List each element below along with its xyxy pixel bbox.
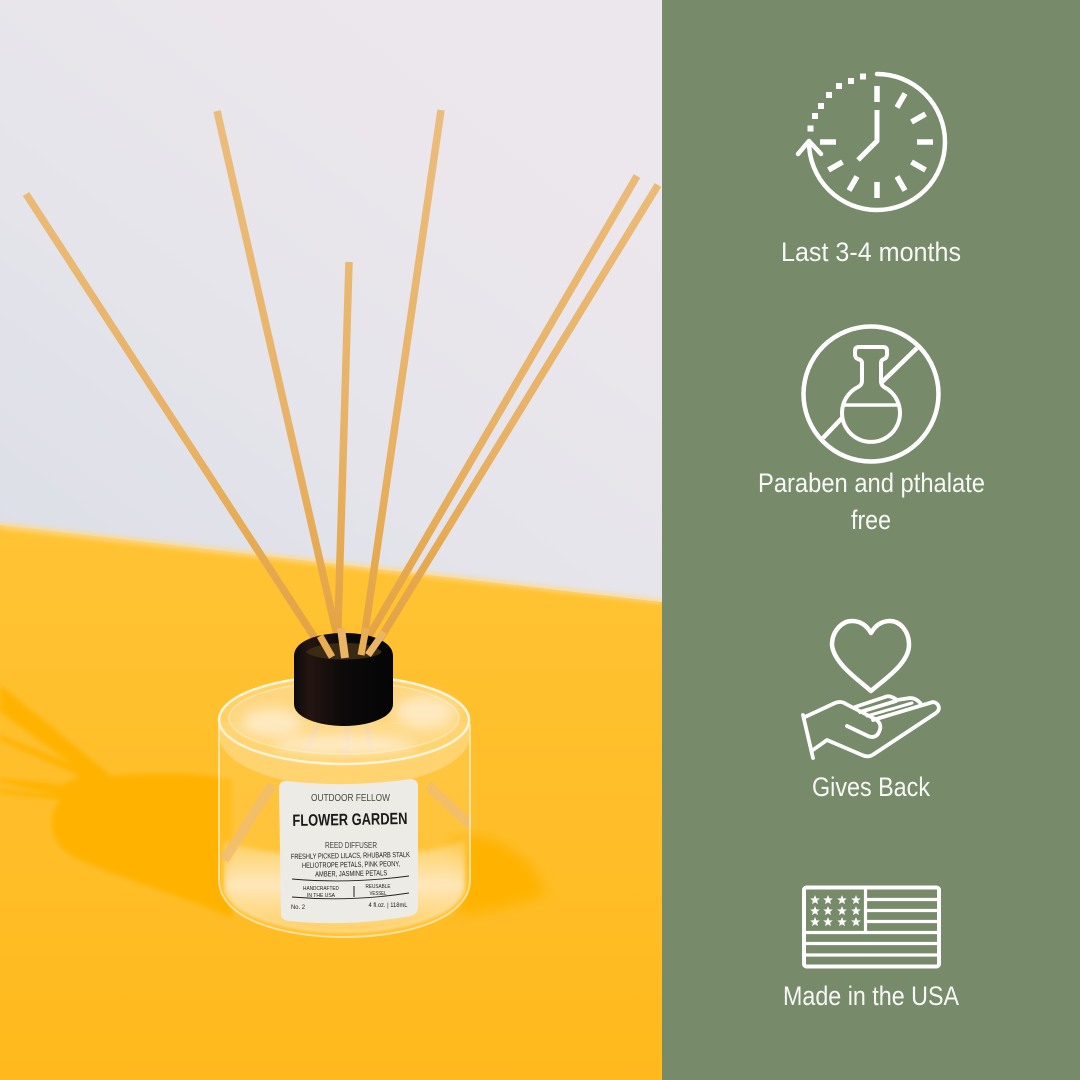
liquid in bottle (224, 840, 465, 930)
product name: FLOWER GARDEN (292, 810, 408, 830)
fragrance notes: AMBER, JASMINE PETALS (315, 868, 387, 879)
icon: hand holding heart (803, 621, 939, 758)
icon: American flag (804, 888, 939, 966)
reusable note (366, 884, 391, 897)
icon: crossed-out flask (804, 326, 938, 462)
submerged reeds (224, 724, 470, 860)
caption: origin: Made in the USA (783, 981, 959, 1011)
fragrance notes: FRESHLY PICKED LILACS, RHUBARB STALK (291, 850, 410, 861)
panel: product benefits (662, 0, 1080, 1080)
diffuser reeds (26, 110, 658, 658)
handcrafted note (303, 886, 339, 899)
caption: ingredients: Paraben and pthalate (758, 468, 985, 498)
caption: ingredients: free (851, 505, 891, 535)
batch number: No. 2 (291, 904, 305, 911)
fragrance notes: HELIOTROPE PETALS, PINK PEONY, (302, 859, 400, 870)
handcrafted note: HANDCRAFTED (303, 886, 339, 892)
glass bottle (219, 676, 470, 937)
caption: charity: Gives Back (812, 772, 930, 802)
product label (279, 779, 418, 923)
icon: clock with circular arrow (798, 74, 945, 210)
photo background: wall (0, 0, 662, 610)
reusable note: VESSEL (370, 891, 387, 897)
fragrance notes (291, 850, 410, 879)
reusable note: REUSABLE (366, 884, 391, 890)
product type: REED DIFFUSER (325, 841, 377, 850)
caption: ingredients (758, 468, 985, 535)
caption: longevity: Last 3-4 months (781, 237, 961, 267)
brand name: OUTDOOR FELLOW (311, 793, 390, 804)
glass shoulder (219, 676, 469, 764)
black bottle cap (294, 628, 393, 726)
handcrafted note: IN THE USA (307, 893, 335, 899)
photo background: yellow table (0, 522, 662, 1080)
volume: 4 fl.oz. | 118mL (368, 902, 408, 909)
diffuser shadow on table (0, 685, 545, 918)
flag stars (810, 895, 861, 926)
